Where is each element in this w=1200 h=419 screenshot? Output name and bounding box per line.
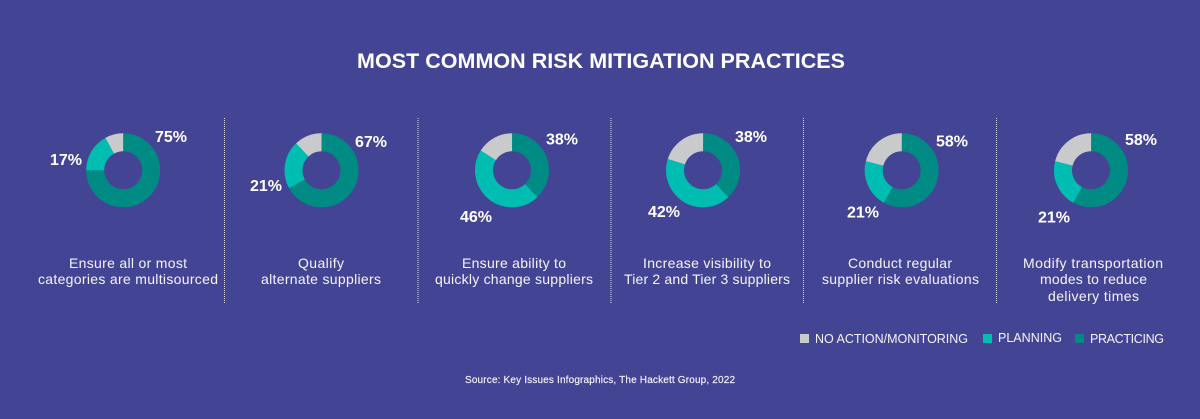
donut chart: 67 / 21 / 12 (282, 131, 361, 210)
value: planning 17%: 17% (50, 152, 82, 169)
caption: supplier risk evaluations (822, 271, 979, 287)
donut chart: 38 / 46 / 16 (472, 131, 552, 210)
value: planning 21%: 21% (847, 204, 879, 222)
caption: Modify transportation (1023, 255, 1163, 271)
donut chart: 75 / 17 / 8 (85, 132, 161, 208)
value: planning 42%: 42% (648, 204, 680, 221)
panel: supplier risk evaluations (822, 132, 979, 287)
panel: multisourced categories (38, 129, 218, 287)
value: planning 21%: 21% (250, 178, 282, 195)
donut chart: 38 / 42 / 20 (663, 131, 743, 210)
value: planning 46%: 46% (460, 209, 492, 226)
value: practicing 58%: 58% (936, 134, 968, 151)
caption: categories are multisourced (38, 271, 218, 287)
caption: Ensure all or most (69, 255, 187, 271)
legend item: practicing: PRACTICING (1090, 332, 1164, 346)
panel: transportation modes (1023, 132, 1163, 304)
caption: quickly change suppliers (435, 271, 593, 287)
caption: Conduct regular (848, 255, 952, 271)
value: practicing 38%: 38% (546, 132, 578, 148)
caption: Increase visibility to (643, 255, 771, 271)
panel: alternate suppliers (250, 131, 387, 287)
panel: change suppliers quickly (435, 131, 593, 287)
title: MOST COMMON RISK MITIGATION PRACTICES (357, 49, 845, 73)
caption: Tier 2 and Tier 3 suppliers (624, 271, 790, 287)
value: practicing 67%: 67% (355, 134, 387, 151)
donut chart: 58 / 21 / 21 (864, 132, 940, 208)
legend item: no action/monitoring: NO ACTION/MONITORING (815, 332, 968, 346)
caption (38, 255, 218, 287)
caption: Qualify (298, 255, 344, 271)
caption (1023, 255, 1163, 304)
caption (624, 255, 790, 287)
donut chart: 58 / 21 / 21 (1053, 132, 1129, 208)
source note: Source: Key Issues Infographics, The Hackett Group, 2022 (465, 375, 735, 386)
caption: delivery times (1048, 288, 1139, 304)
caption (822, 255, 979, 287)
caption: alternate suppliers (261, 271, 381, 287)
caption: modes to reduce (1040, 271, 1147, 287)
legend item: planning: PLANNING (998, 331, 1062, 345)
value: practicing 38%: 38% (735, 129, 767, 146)
caption (435, 255, 593, 287)
value: practicing 75%: 75% (155, 129, 187, 146)
panel: tier 2 and 3 visibility (624, 129, 790, 287)
value: practicing 58%: 58% (1125, 132, 1157, 149)
caption: Ensure ability to (462, 255, 566, 271)
legend (800, 331, 1164, 346)
caption (261, 255, 381, 287)
value: planning 21%: 21% (1038, 210, 1070, 226)
